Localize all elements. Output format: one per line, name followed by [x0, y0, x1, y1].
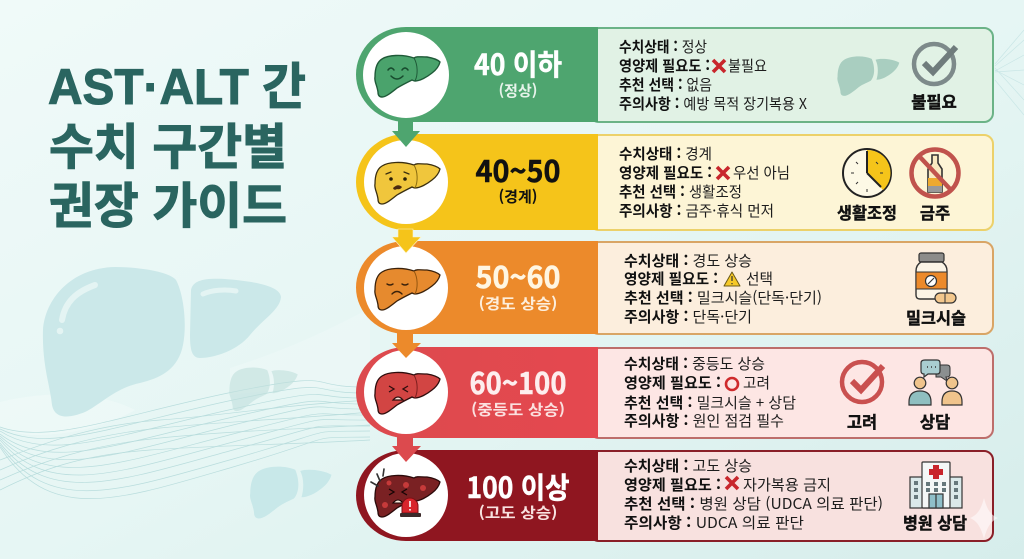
icon: check: [914, 44, 956, 84]
detail text: 수치상태 : 경도 상승: [624, 250, 752, 271]
title: AST·ALT 간: [48, 59, 306, 115]
detail text: 영양제 필요도 :: [624, 474, 721, 495]
detail text: 우선 아님: [733, 162, 790, 183]
title: [48, 59, 306, 234]
range value: (정상): [499, 80, 537, 101]
liver badge: [363, 32, 449, 118]
decorative small liver, middle: [229, 367, 298, 411]
range value: (경계): [499, 186, 537, 207]
title: 권장 가이드: [49, 180, 287, 234]
detail panel: [590, 451, 993, 541]
range value: 60~100: [470, 359, 566, 403]
detail text: [624, 250, 822, 327]
range value: [470, 359, 566, 420]
colour band: [356, 347, 598, 438]
detail text: 선택: [746, 268, 773, 289]
detail text: 주의사항 : 예방 목적 장기복용 X: [619, 93, 807, 114]
detail text: 추천 선택 : 생활조정: [619, 181, 742, 202]
sparkle watermark: [970, 498, 998, 539]
range value: 40~50: [476, 147, 560, 191]
detail text: 수치상태 : 중등도 상승: [624, 353, 765, 374]
colour band: [356, 450, 598, 541]
row 4: 60~100: [356, 347, 993, 438]
row 3: 50~60: [356, 241, 993, 334]
detail panel: [590, 242, 993, 334]
icon: siren: [400, 498, 421, 517]
label: 밀크시슬: 밀크시슬: [906, 305, 966, 329]
icon: supplement bottle: [916, 253, 956, 303]
arrow: row 3 to row 4: [392, 333, 421, 358]
detail text: 주의사항 : 단독·단기: [624, 306, 752, 327]
liver badge: [364, 350, 448, 434]
detail text: 영양제 필요도 :: [619, 55, 710, 76]
range value: 50~60: [476, 253, 560, 297]
decorative small liver, lower: [250, 467, 332, 518]
range value: 100 이상: [466, 465, 570, 507]
range value: [466, 465, 570, 523]
detail text: 주의사항 : 금주·휴식 먼저: [619, 200, 774, 221]
icon: circle mark: [726, 378, 738, 390]
icon: no alcohol: [912, 150, 958, 196]
detail text: 추천 선택 : 밀크시슬(단독·단기): [624, 287, 822, 308]
detail text: 추천 선택 : 없음: [619, 74, 712, 95]
label: 금주: 금주: [920, 200, 950, 224]
detail text: 수치상태 : 고도 상승: [624, 455, 752, 476]
detail text: [619, 36, 807, 114]
label: 불필요: 불필요: [911, 89, 957, 113]
row 1: 40 이하: [356, 27, 993, 122]
detail text: 자가복용 금지: [743, 474, 831, 495]
detail text: 영양제 필요도 :: [619, 162, 712, 183]
detail text: [624, 455, 883, 533]
icon: consultation people: [909, 360, 962, 405]
colour band: [356, 241, 598, 334]
arrow: row 2 to row 3: [392, 229, 421, 253]
liver badge: [364, 140, 448, 224]
icon: clock: [843, 149, 891, 197]
detail text: 추천 선택 : 밀크시슬 + 상담: [624, 392, 796, 413]
detail text: [624, 353, 796, 431]
range value: 40 이하: [474, 42, 562, 84]
row 2: 40~50: [356, 134, 993, 230]
arrow: row 4 to row 5: [392, 437, 421, 462]
range value: [474, 42, 562, 101]
liver badge: [364, 453, 448, 537]
detail text: 주의사항 : UDCA 의료 판단: [624, 512, 804, 533]
title: 수치 구간별: [49, 121, 287, 175]
detail text: 고려: [743, 372, 770, 393]
icon: pale liver: [837, 56, 899, 96]
row 5: 100 이상: [356, 450, 993, 541]
label: 생활조정: 생활조정: [837, 200, 897, 224]
detail text: 주의사항 : 원인 점검 필수: [624, 410, 784, 431]
icon: red check: [842, 362, 883, 402]
colour band: [356, 134, 598, 230]
label: 병원 상담: 병원 상담: [903, 510, 967, 534]
detail panel: [590, 28, 993, 122]
arrow: row 1 to row 2: [392, 121, 420, 147]
colour band: [356, 27, 598, 122]
detail text: 불필요: [728, 55, 767, 76]
detail text: 영양제 필요도 :: [624, 268, 718, 289]
detail text: 수치상태 : 정상: [619, 36, 707, 57]
detail text: [619, 143, 790, 221]
range value: (고도 상승): [478, 502, 558, 523]
label: 고려: 고려: [847, 409, 877, 433]
decorative large liver: [43, 267, 281, 416]
detail text: 수치상태 : 경계: [619, 143, 712, 164]
detail text: 추천 선택 : 병원 상담 (UDCA 의료 판단): [624, 493, 883, 514]
icon: hospital: [910, 462, 962, 508]
label: 상담: 상담: [920, 409, 950, 433]
liver badge: [364, 246, 448, 330]
detail text: 영양제 필요도 :: [624, 372, 721, 393]
icon: warning: [724, 272, 740, 286]
range value: (경도 상승): [478, 293, 558, 314]
detail panel: [590, 348, 993, 438]
range value: (중등도 상승): [471, 399, 565, 420]
detail panel: [590, 135, 993, 230]
